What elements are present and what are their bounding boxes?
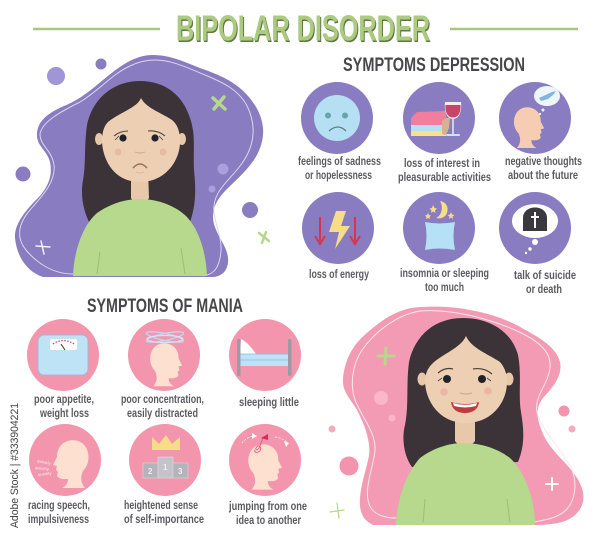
title: bipolar disorder: BIPOLAR DISORDER xyxy=(177,9,431,50)
item: heightened sense xyxy=(124,424,204,526)
icon: head with arrows xyxy=(242,433,289,490)
icon: head speaking quickly: quickly xyxy=(37,458,52,466)
panel: happy woman illustration xyxy=(328,307,583,525)
pink blob background xyxy=(343,307,583,525)
face xyxy=(425,336,507,423)
sweater folds xyxy=(423,499,510,523)
ears xyxy=(95,133,186,145)
item: insomnia: too much xyxy=(425,282,464,294)
title: bipolar disorder xyxy=(33,8,578,50)
heading: symptoms of mania: SYMPTOMS OF MANIA xyxy=(87,296,243,317)
icon: lightning and down arrows xyxy=(315,211,360,249)
item: poor concentration: poor concentration, xyxy=(121,394,204,406)
item: insomnia: insomnia or sleeping xyxy=(400,268,489,280)
icon: head with spinning rings xyxy=(146,330,184,386)
item: racing speech: racing speech, xyxy=(28,500,90,512)
item: loss of energy xyxy=(302,192,374,281)
item: talk of suicide: or death xyxy=(526,284,562,296)
item: sleeping little xyxy=(229,319,301,409)
icon: sad face xyxy=(314,95,360,141)
white outline on blob xyxy=(20,60,253,275)
happy facial features xyxy=(438,368,492,413)
hair xyxy=(403,318,523,467)
icon: bathroom scale xyxy=(38,335,88,375)
hair xyxy=(82,81,195,224)
decorative dots xyxy=(328,391,576,476)
item: negative thoughts xyxy=(499,82,582,182)
decorative crosses xyxy=(36,97,269,254)
icon: head speaking quickly: quickly xyxy=(38,471,53,477)
icon: head speaking quickly: quickly xyxy=(35,465,50,472)
title: bipolar disorder: BIPOLAR DISORDER xyxy=(176,8,430,48)
green sweater xyxy=(396,443,535,525)
item: loss of energy: loss of energy xyxy=(309,269,369,281)
icon: crown and podium: 3 xyxy=(178,467,183,476)
item: racing speech: impulsiveness xyxy=(28,514,89,526)
icon: book and wine glass xyxy=(411,102,461,136)
item: negative thoughts: about the future xyxy=(508,170,578,182)
decorative crosses xyxy=(330,348,558,518)
item: poor appetite xyxy=(27,319,99,420)
item: feelings of sadness: or hopelessness xyxy=(305,170,372,182)
white outline on blob xyxy=(352,311,575,522)
item: heightened sense: heightened sense xyxy=(124,500,198,512)
heading: symptoms depression: SYMPTOMS DEPRESSION xyxy=(343,55,525,76)
item: jumping ideas: jumping from one xyxy=(228,501,307,513)
purple blob background xyxy=(15,55,263,277)
item: talk of suicide: talk of suicide xyxy=(514,270,576,282)
item: poor concentration xyxy=(121,319,204,420)
green sweater xyxy=(73,199,207,276)
item: poor appetite: poor appetite, xyxy=(34,394,94,406)
item: jumping ideas: idea to another xyxy=(236,515,301,527)
item: loss of interest xyxy=(398,82,491,184)
sweater folds xyxy=(97,248,185,274)
item: poor concentration: easily distracted xyxy=(127,408,198,420)
item: heightened sense: of self-importance xyxy=(124,514,204,526)
sad facial features xyxy=(114,131,166,173)
item: talk of suicide xyxy=(499,192,576,296)
icon: crown and podium: 1 xyxy=(163,463,168,472)
item: loss of interest: loss of interest in xyxy=(404,158,480,170)
item: feelings of sadness xyxy=(298,82,381,182)
face xyxy=(102,98,180,182)
neck xyxy=(131,170,149,202)
icon: pillow moon and stars xyxy=(425,201,455,250)
item: feelings of sadness: feelings of sadness xyxy=(298,156,381,168)
item: racing speech xyxy=(28,424,101,526)
ears xyxy=(418,372,514,386)
adobe stock vertical credit: Adobe Stock | #333904221 xyxy=(9,403,21,528)
item: loss of interest: pleasurable activities xyxy=(398,172,491,184)
item: sleeping little: sleeping little xyxy=(239,397,299,409)
neck xyxy=(455,410,475,446)
item: poor appetite: weight loss xyxy=(39,408,89,420)
icon: crown and podium xyxy=(143,435,188,478)
icon: bed xyxy=(237,339,292,376)
icon: head speaking quickly xyxy=(35,440,89,488)
decorative dots xyxy=(16,58,258,218)
item: insomnia xyxy=(400,192,489,294)
icon: thought bubble with tombstone xyxy=(512,204,558,254)
item: jumping ideas xyxy=(228,424,307,527)
panel: sad woman illustration xyxy=(15,55,269,277)
icon: crown and podium: 2 xyxy=(148,467,153,476)
icon: head with thought cloud xyxy=(514,86,560,148)
